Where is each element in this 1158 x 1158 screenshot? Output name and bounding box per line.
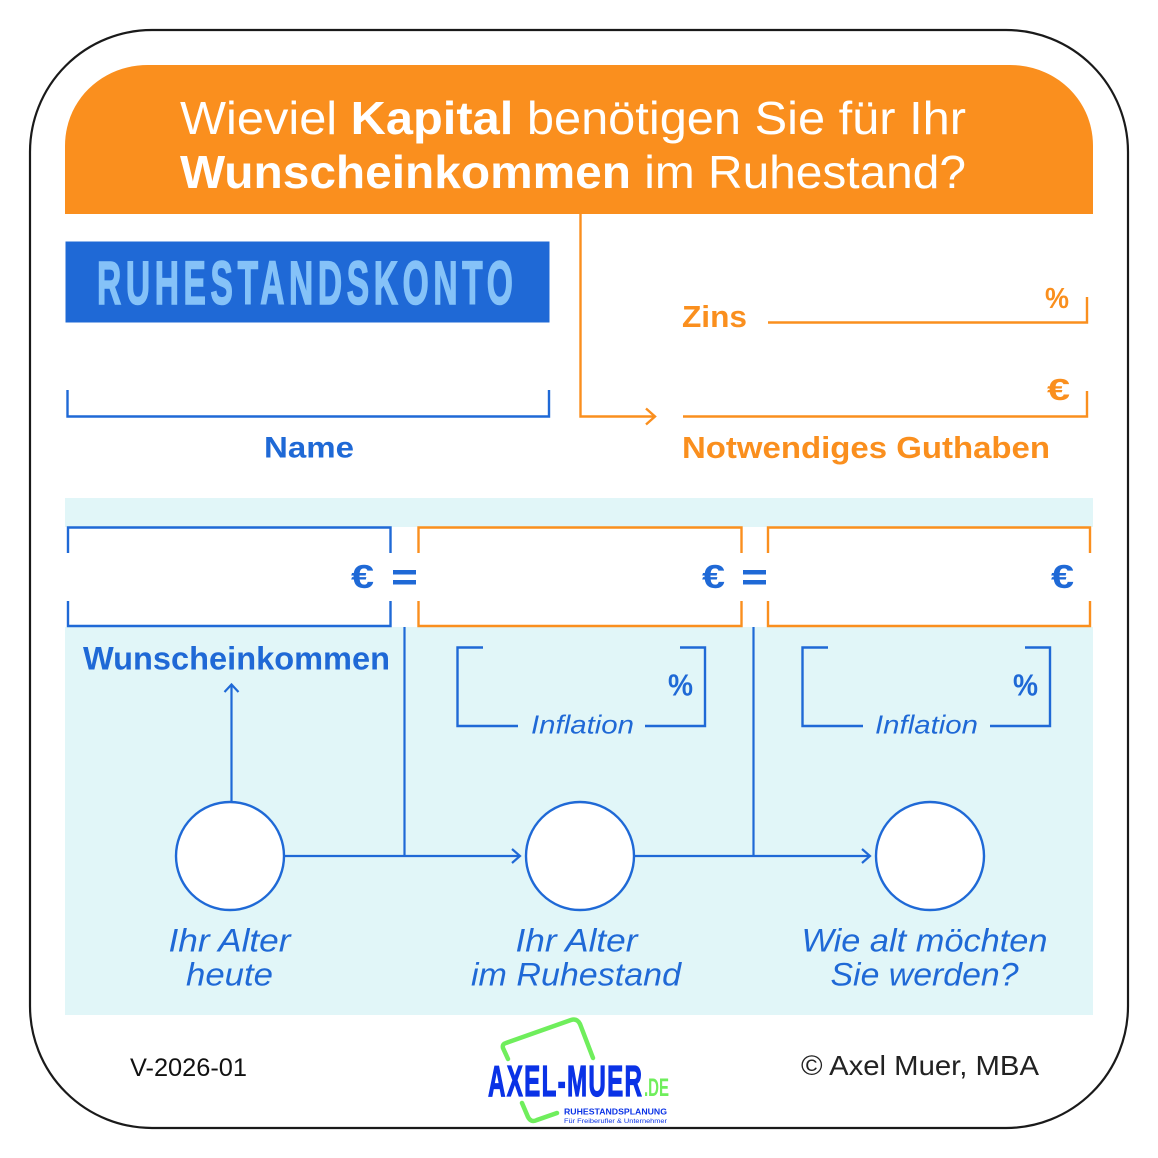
Zins field: Zins	[682, 299, 747, 334]
Notwendiges Guthaben field	[682, 372, 1087, 465]
Zins field: %	[1045, 283, 1069, 315]
name field: Name	[264, 432, 354, 464]
panel: calculation background	[65, 498, 1093, 1015]
logo: Axel Muer: Für Freiberufler & Unternehmer	[564, 1118, 668, 1125]
circle: current age: Ihr Alter	[168, 922, 292, 958]
header banner	[65, 65, 1093, 214]
inflation field 1	[458, 648, 705, 740]
field: amount at end of life: €	[1051, 558, 1074, 595]
arrow: header to Notwendiges Guthaben	[580, 214, 655, 424]
inflation field 2	[802, 648, 1050, 740]
arrow: age to Wunscheinkommen	[224, 684, 238, 802]
equals sign 2	[743, 570, 766, 584]
equals sign 1	[393, 570, 416, 584]
Zins field	[682, 283, 1087, 334]
circle: retirement age: im Ruhestand	[471, 956, 682, 992]
logo: Axel Muer: .DE	[644, 1074, 669, 1102]
inflation field 1: Inflation	[531, 710, 634, 740]
inflation field 2: %	[1013, 668, 1038, 702]
circle: life expectancy: Wie alt möchten	[802, 922, 1048, 958]
circle: current age	[168, 802, 292, 992]
version label: V-2026-01	[130, 1054, 247, 1082]
logo: Axel Muer: RUHESTANDSPLANUNG	[564, 1106, 667, 1116]
field: amount at retirement: €	[702, 558, 725, 595]
inflation field 2: Inflation	[875, 710, 978, 740]
timeline connectors	[284, 627, 870, 863]
circle: life expectancy: Sie werden?	[830, 956, 1019, 992]
name field	[68, 390, 549, 464]
copyright: © Axel Muer, MBA	[801, 1050, 1039, 1081]
logo: Axel Muer	[488, 1020, 669, 1125]
Notwendiges Guthaben field: €	[1047, 372, 1070, 407]
field: amount at retirement	[418, 528, 742, 626]
circle: current age: heute	[186, 956, 273, 992]
circle: retirement age: Ihr Alter	[516, 922, 639, 958]
circle: life expectancy	[802, 802, 1048, 992]
field: amount at end of life	[768, 528, 1090, 626]
inflation field 1: %	[668, 668, 693, 702]
Notwendiges Guthaben field: Notwendiges Guthaben	[682, 430, 1050, 465]
title line 2: Wunscheinkommen im Ruhestand?	[180, 146, 966, 198]
label: Wunscheinkommen: Wunscheinkommen	[83, 640, 390, 676]
logo: Axel Muer: AXEL-MUER	[488, 1056, 642, 1106]
field: Wunscheinkommen amount	[68, 528, 390, 626]
circle: retirement age	[471, 802, 682, 992]
panel: Ruhestandskonto badge: RUHESTANDSKONTO	[97, 249, 513, 318]
title line 1: Wieviel Kapital benötigen Sie für Ihr	[180, 92, 966, 144]
field: Wunscheinkommen amount: €	[351, 558, 374, 595]
